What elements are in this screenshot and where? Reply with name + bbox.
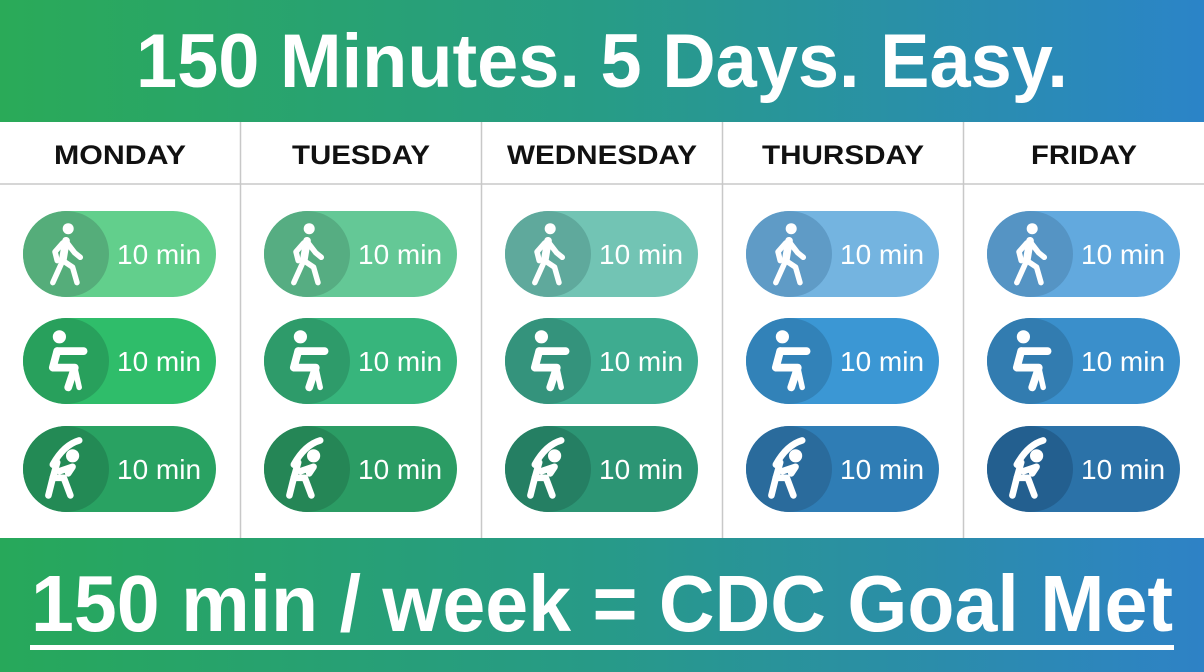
column: Tuesday: 10 min xyxy=(358,454,442,485)
column: Friday xyxy=(987,211,1180,512)
day headings xyxy=(54,140,1137,170)
column: Tuesday xyxy=(264,211,457,512)
column: Friday: 10 min xyxy=(1081,239,1165,270)
footer statement: 150 min / week = CDC Goal Met xyxy=(31,559,1173,648)
day headings: MONDAY xyxy=(54,140,186,170)
title: 150 Minutes. 5 Days. Easy. xyxy=(136,19,1068,104)
column: Wednesday: 10 min xyxy=(599,239,683,270)
day headings: FRIDAY xyxy=(1031,140,1137,170)
column: Tuesday: 10 min xyxy=(358,239,442,270)
day headings: THURSDAY xyxy=(762,140,924,170)
column: Monday xyxy=(23,211,216,512)
column: Thursday xyxy=(746,211,939,512)
header banner xyxy=(0,0,1204,122)
day headings: TUESDAY xyxy=(292,140,430,170)
column: Thursday: 10 min xyxy=(840,239,924,270)
day table xyxy=(0,122,1204,538)
column: Thursday: 10 min xyxy=(840,346,924,377)
column: Thursday: 10 min xyxy=(840,454,924,485)
column: Monday: 10 min xyxy=(117,239,201,270)
day headings: WEDNESDAY xyxy=(507,140,697,170)
column: Friday: 10 min xyxy=(1081,346,1165,377)
column: Monday: 10 min xyxy=(117,454,201,485)
column: Wednesday xyxy=(505,211,698,512)
column: Friday: 10 min xyxy=(1081,454,1165,485)
column: Monday: 10 min xyxy=(117,346,201,377)
footer banner xyxy=(0,538,1204,672)
column: Tuesday: 10 min xyxy=(358,346,442,377)
column: Wednesday: 10 min xyxy=(599,454,683,485)
column: Wednesday: 10 min xyxy=(599,346,683,377)
